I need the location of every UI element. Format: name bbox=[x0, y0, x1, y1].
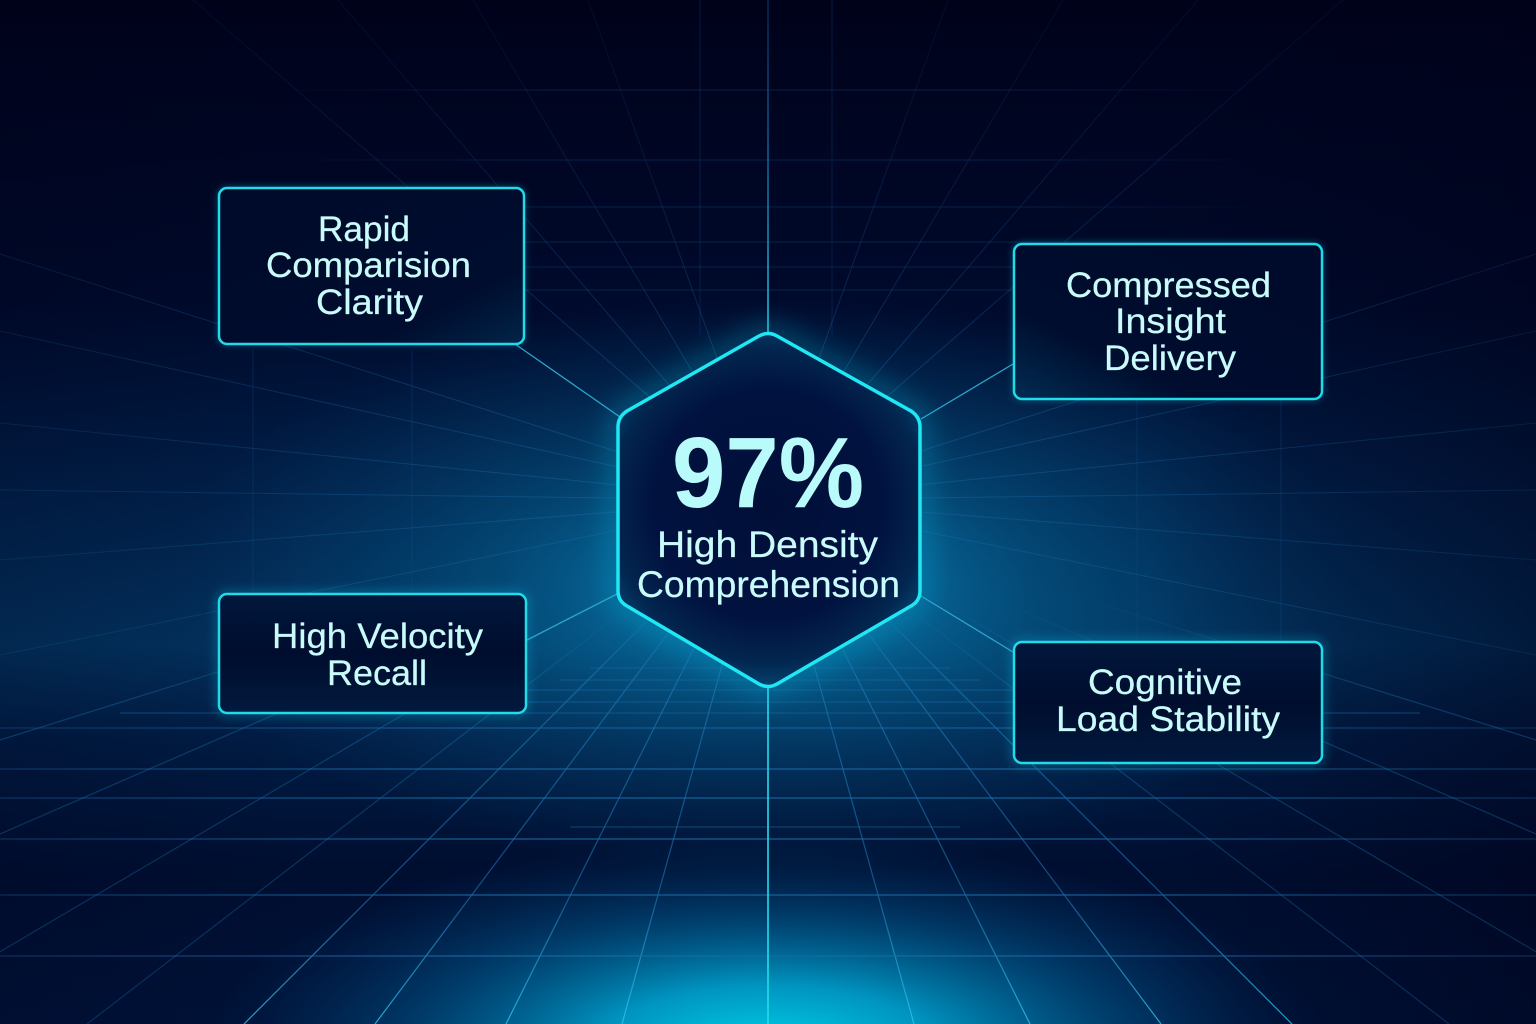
box: High Velocity Recall bbox=[219, 594, 526, 713]
hexagon: central metric bbox=[618, 334, 920, 686]
box: Rapid Comparision Clarity: Rapid bbox=[318, 210, 410, 249]
central vertical axis lines bbox=[767, 0, 769, 1024]
box: Cognitive Load Stability: Cognitive bbox=[1088, 663, 1242, 702]
big number: 97% bbox=[672, 417, 864, 529]
hexagon label: Comprehension bbox=[637, 564, 900, 605]
box: Rapid Comparision Clarity: Comparision bbox=[266, 246, 471, 285]
box: High Velocity Recall: Recall bbox=[327, 654, 427, 693]
connector lines from hexagon to boxes bbox=[515, 344, 1013, 652]
box: Cognitive Load Stability bbox=[1014, 642, 1322, 763]
hexagon label: High Density bbox=[657, 524, 879, 565]
box: High Velocity Recall: High Velocity bbox=[272, 617, 484, 656]
box: Compressed Insight Delivery: Compressed bbox=[1066, 266, 1271, 305]
box: Rapid Comparision Clarity bbox=[219, 188, 524, 344]
box: Compressed Insight Delivery: Delivery bbox=[1104, 339, 1237, 378]
box: Compressed Insight Delivery bbox=[1014, 244, 1322, 399]
box: Compressed Insight Delivery: Insight bbox=[1115, 302, 1226, 341]
hexagon label bbox=[637, 524, 900, 605]
box: Cognitive Load Stability: Load Stability bbox=[1056, 700, 1281, 739]
box: Rapid Comparision Clarity: Clarity bbox=[316, 283, 424, 322]
